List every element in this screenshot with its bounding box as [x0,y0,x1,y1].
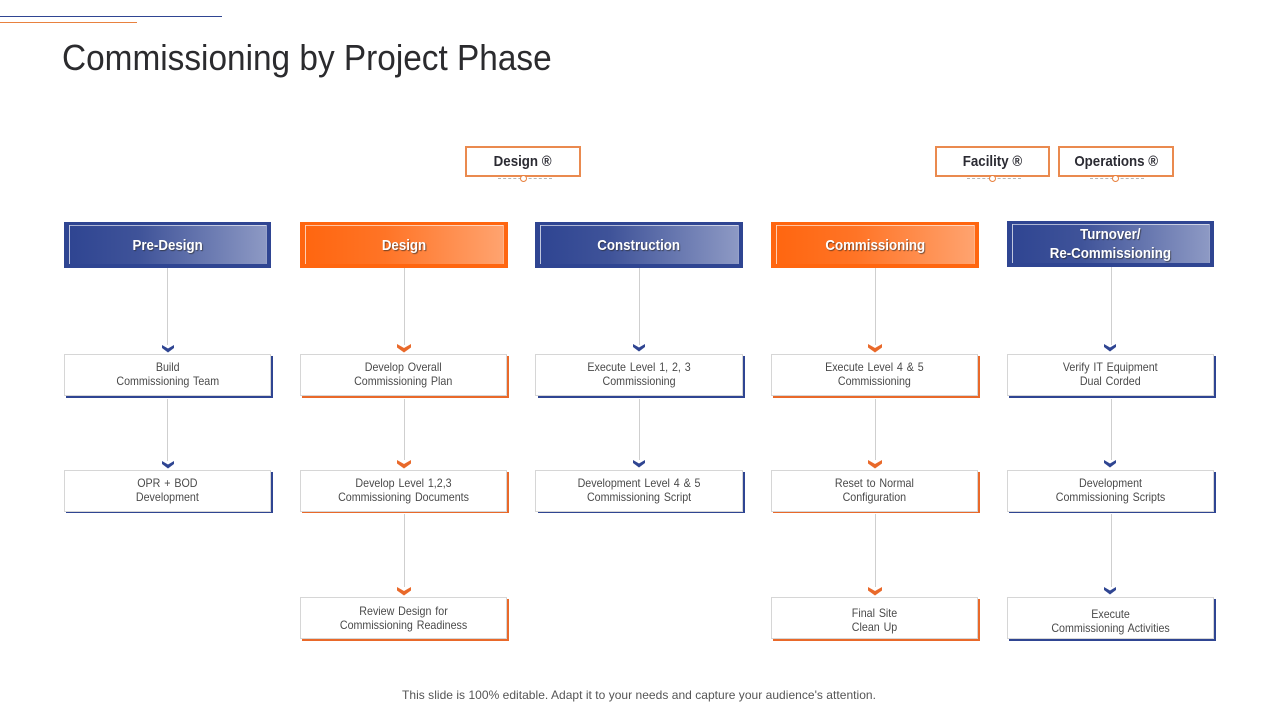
box: Develop Overall Commissioning Plan [300,354,507,396]
box shadow: OPR [66,472,273,513]
tag: Operations: Operations ® [1074,153,1158,170]
column: Commissioning [771,222,980,641]
column: Pre-Design [64,222,273,513]
box shadow: Execute Activities [1009,599,1216,641]
box: Execute Level 4 & 5 Commissioning: Commissioning [838,374,911,388]
column: Design [300,222,509,641]
tag: Facility: Facility ® [963,153,1022,170]
arrow: Construction 1 [633,344,645,352]
box: Execute Commissioning Activities [1007,597,1214,639]
box: Final Site Clean Up [771,597,978,639]
arrow: Commissioning 3 [868,587,882,596]
connector: Turnover middle [1111,399,1112,460]
box: Develop Overall Commissioning Plan: Commissioning Plan [354,374,453,388]
arrow: Commissioning 2 [868,460,882,468]
box: Verify IT Equipment Dual Corded [1007,354,1214,396]
arrow: Commissioning 1 [868,344,882,352]
arrow: Pre-Design 2 [162,461,174,468]
arrow: Turnover 2 [1104,460,1116,468]
box: Develop Level 1,2,3 Commissioning Documents: Commissioning Documents [338,490,469,504]
header: Turnover / Re-Commissioning: Turnover/ [1080,226,1141,243]
box: Develop Overall Commissioning Plan: Develop Overall [365,360,442,374]
box: Review Design for Commissioning Readiness [300,597,507,639]
box: Development Level 4 & 5 Commissioning Script: Commissioning Script [587,490,691,504]
connector: Construction top [639,268,640,345]
header: Construction: Construction [598,236,680,254]
box: Build Commissioning Team [64,354,271,396]
box: Verify IT Equipment Dual Corded: Dual Corded [1080,374,1141,388]
tag: Design [465,146,581,182]
header: Design [300,222,508,268]
box shadow: Development Scripts [1009,472,1216,513]
arrow: Construction 2 [633,460,645,468]
box: Reset to Normal Configuration: Reset to Normal [835,476,914,490]
arrow: Turnover 1 [1104,344,1116,352]
connector: Design middle [404,399,405,460]
box: Final Site Clean Up: Clean Up [852,620,897,634]
box: Development Level 4 & 5 Commissioning Script: Development Level 4 & 5 [578,476,700,490]
box shadow: Development Level [538,472,745,513]
column: Turnover [1007,221,1216,641]
header: Construction [535,222,743,268]
box: OPR + BOD Development: Development [136,490,199,504]
box: Development Commissioning Scripts: Development [1079,476,1142,490]
arrow: Turnover 3 [1104,587,1116,594]
box: Execute Level 4 & 5 Commissioning [771,354,978,396]
box: Build Commissioning Team: Build [156,360,179,374]
tag: Operations [1058,146,1174,182]
box: Execute Level 1, 2, 3 Commissioning: Commissioning [602,374,675,388]
connector: Commissioning middle [875,399,876,460]
decorative header rule: navy [0,16,222,17]
footer note: This slide is 100% editable. Adapt it to your needs and capture your audience's attention. [402,688,876,702]
box: Reset to Normal Configuration [771,470,978,512]
header: Commissioning: Commissioning [825,236,925,254]
box shadow: Develop Overall [302,356,509,398]
arrow: Design 1 [397,344,411,352]
box: Execute Commissioning Activities: Execute [1091,607,1130,621]
header: Commissioning [771,222,979,268]
box shadow: Execute Level 4 5 [773,356,980,398]
box: Development Commissioning Scripts: Commissioning Scripts [1056,490,1165,504]
connector: Turnover bottom [1111,514,1112,587]
header: Design: Design [382,236,426,254]
box: Review Design for Commissioning Readiness: Commissioning Readiness [340,618,467,632]
arrow: Design 2 [397,460,411,468]
box: Execute Commissioning Activities: Commissioning Activities [1051,621,1170,635]
box: Develop Level 1,2,3 Commissioning Documents [300,470,507,512]
connector: Construction middle [639,399,640,460]
box: Development Commissioning Scripts [1007,470,1214,512]
box shadow: Reset [773,472,980,513]
title: Commissioning by Project Phase [62,37,552,78]
header: Turnover / Re-Commissioning [1007,221,1214,267]
column: Construction [535,222,745,513]
box: OPR + BOD Development [64,470,271,512]
connector: Design top [404,268,405,345]
box: Final Site Clean Up: Final Site [852,606,897,620]
tag: Design: Design ® [494,153,552,170]
arrow: Pre-Design 1 [162,345,174,352]
box: Develop Level 1,2,3 Commissioning Documents: Develop Level 1,2,3 [355,476,452,490]
box shadow: Develop Level [302,472,509,513]
connector: Design bottom [404,514,405,587]
header: Turnover / Re-Commissioning: Re-Commissioning [1050,245,1171,262]
connector: Commissioning bottom [875,514,876,587]
connector: Commissioning top [875,268,876,345]
box: Verify IT Equipment Dual Corded: Verify IT Equipment [1063,360,1158,374]
header: Pre-Design [64,222,271,268]
connector: Pre-Design top [167,268,168,345]
box shadow: Execute Level 1 2 3 [538,356,745,398]
connector: Pre-Design middle [167,399,168,461]
box: Review Design for Commissioning Readiness: Review Design for [359,604,448,618]
connector: Turnover top [1111,267,1112,345]
decorative header rule: orange [0,22,137,23]
box shadow: Review Design [302,599,509,641]
box: Reset to Normal Configuration: Configuration [843,490,906,504]
box: Execute Level 1, 2, 3 Commissioning [535,354,743,396]
box shadow: Verify IT [1009,356,1216,398]
box: Execute Level 4 & 5 Commissioning: Execute Level 4 & 5 [825,360,924,374]
tag: Facility [935,146,1050,182]
arrow: Design 3 [397,587,411,596]
box shadow: Build [66,356,273,398]
box: Build Commissioning Team: Commissioning Team [116,374,219,388]
box: Execute Level 1, 2, 3 Commissioning: Execute Level 1, 2, 3 [587,360,691,374]
box: Development Level 4 & 5 Commissioning Script [535,470,743,512]
box shadow: Final Site [773,599,980,641]
header: Pre-Design: Pre-Design [132,236,203,254]
box: OPR + BOD Development: OPR + BOD [137,476,198,490]
